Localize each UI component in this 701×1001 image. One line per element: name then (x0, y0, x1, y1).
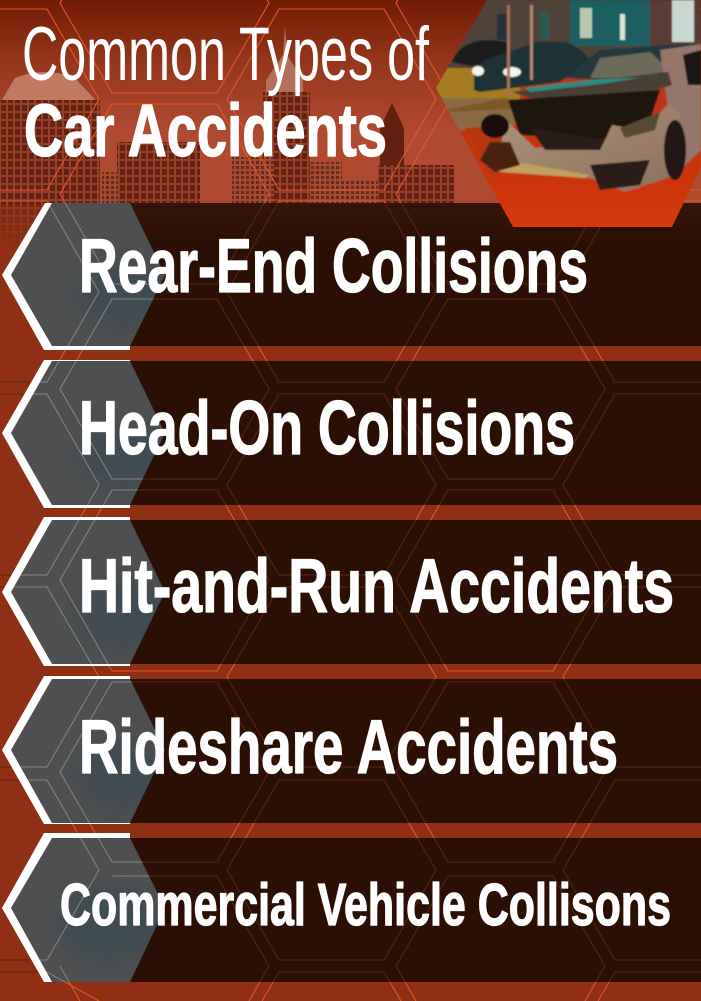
hexagon lines dimmed inside bars (0, 203, 701, 982)
crash photo hexagon (430, 0, 701, 230)
white chevron outlines (2, 203, 130, 982)
dark bars (130, 203, 701, 982)
title (22, 12, 430, 172)
title line: Common Types of: Common Types of (22, 12, 430, 97)
title line: Car Accidents: Car Accidents (24, 89, 387, 172)
grey hexagon tabs (11, 203, 165, 982)
hexagon lines inside grey tabs (14, 203, 161, 982)
header skyline background (0, 0, 701, 249)
